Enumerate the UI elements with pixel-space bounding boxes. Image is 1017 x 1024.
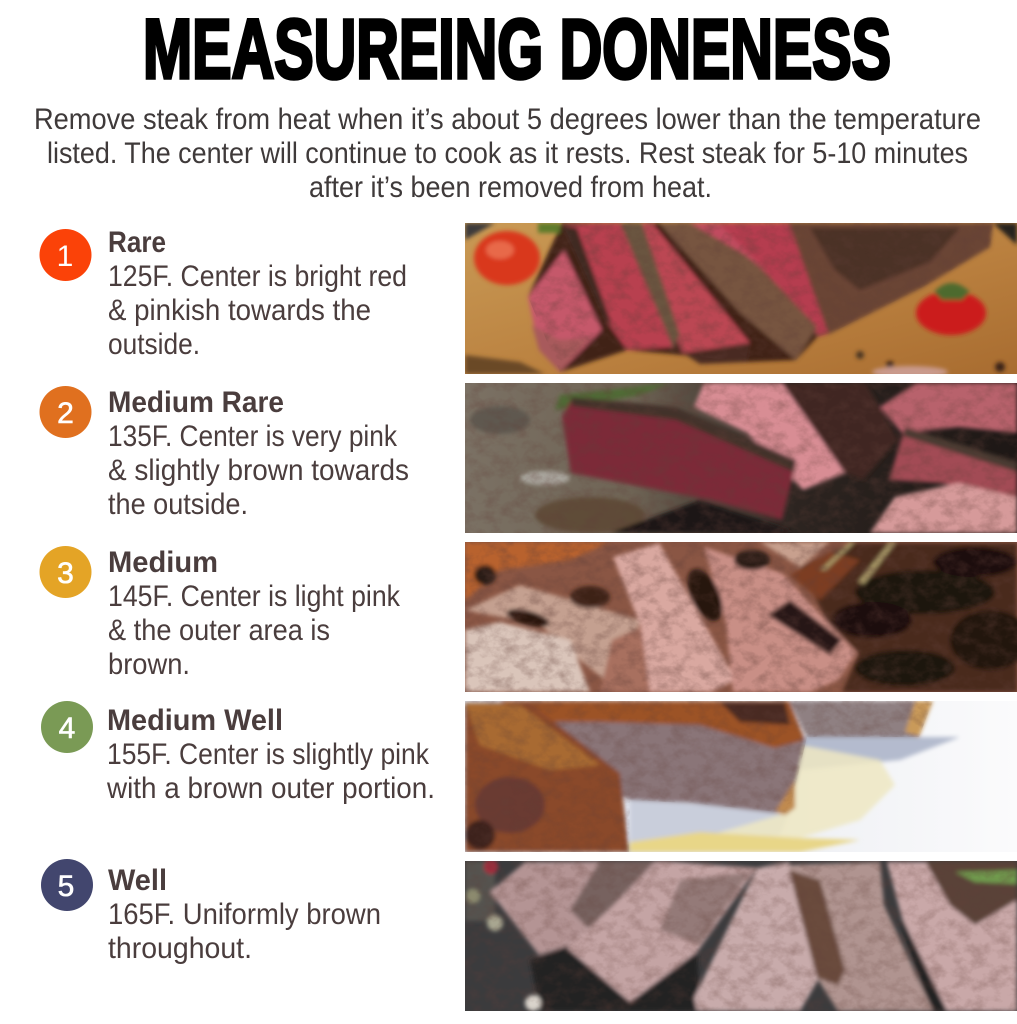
text: rare: 125F. Center is bright red <box>108 260 407 293</box>
badge 4 <box>41 701 93 753</box>
text: medium well: 155F. Center is slightly pink <box>107 738 430 771</box>
text: medium rare <box>108 386 409 521</box>
photo: medium rare steak on stone <box>465 383 1017 533</box>
item 2: medium rare <box>40 386 409 521</box>
photo: medium well steak on plate <box>465 701 962 852</box>
text: medium rare: & slightly brown towards <box>108 454 409 487</box>
texture <box>465 861 1017 1011</box>
text: medium well: with a brown outer portion. <box>106 772 435 805</box>
text: well: throughout. <box>108 932 252 965</box>
badge 4: 4 <box>59 712 75 745</box>
text: rare: & pinkish towards the <box>108 294 371 327</box>
texture <box>465 542 1017 692</box>
item 4: medium well <box>41 701 435 805</box>
text: medium well: Medium Well <box>107 704 283 737</box>
text: well <box>108 864 381 965</box>
photo: medium steak with char <box>465 542 1017 692</box>
badge 2: 2 <box>57 397 74 430</box>
badge 3 <box>40 546 92 598</box>
text: medium rare: the outside. <box>108 488 248 521</box>
text: medium <box>108 546 401 681</box>
badge 1: 1 <box>57 240 73 273</box>
text: rare: outside. <box>108 328 200 361</box>
text: rare: Rare <box>108 226 166 259</box>
intro text: after it’s been removed from heat. <box>309 171 712 204</box>
intro text <box>34 103 981 204</box>
badge 1 <box>40 229 92 281</box>
text: medium: & the outer area is <box>108 614 330 647</box>
badge 3: 3 <box>57 557 74 590</box>
photo: rare steak on wooden board <box>465 223 1017 378</box>
item 1: rare <box>40 226 407 361</box>
badge 2 <box>40 386 92 438</box>
badge 5 <box>41 859 93 911</box>
text: medium well <box>106 704 435 805</box>
texture <box>530 223 990 372</box>
text: well: Well <box>108 864 167 897</box>
text: well: 165F. Uniformly brown <box>108 898 381 931</box>
item 3: medium <box>40 546 401 681</box>
text: medium: brown. <box>108 648 190 681</box>
item 5: well <box>41 859 381 965</box>
text: medium: 145F. Center is light pink <box>108 580 401 613</box>
badge 5: 5 <box>58 870 74 903</box>
photo: well done steak on slate <box>465 860 1017 1011</box>
text: rare <box>108 226 407 361</box>
text: medium rare: 135F. Center is very pink <box>108 420 398 453</box>
texture <box>465 383 1017 533</box>
text: medium: Medium <box>108 546 218 579</box>
texture <box>465 701 933 852</box>
text: medium rare: Medium Rare <box>108 386 284 419</box>
